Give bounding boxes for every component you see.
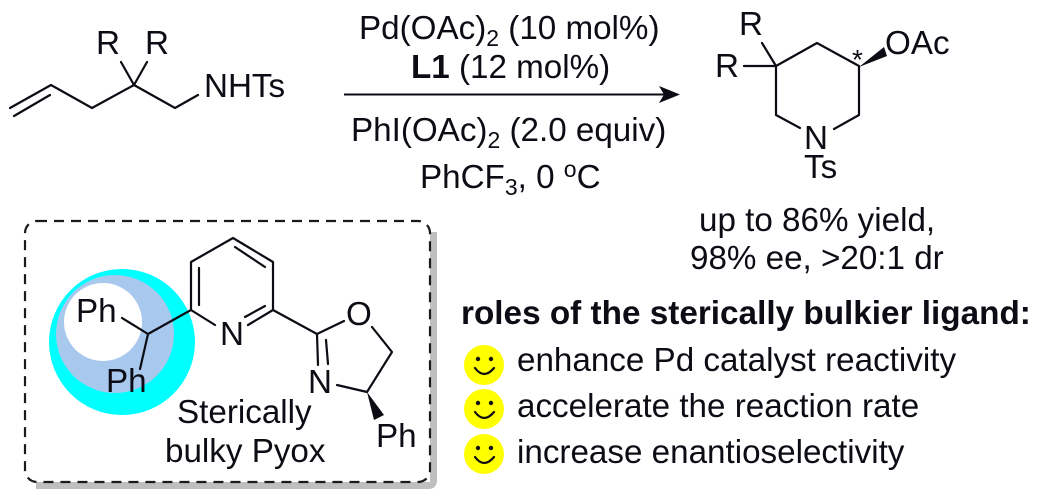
role 3 text: increase enantioselectivity xyxy=(517,434,905,471)
conditions below arrow xyxy=(351,112,666,200)
box shadow xyxy=(36,232,437,489)
reagents above arrow xyxy=(359,10,660,86)
dashed box xyxy=(25,221,430,482)
product: piperidine: R xyxy=(739,6,763,43)
conditions below arrow: 2 xyxy=(487,127,500,153)
icon: smiley 2 xyxy=(464,389,504,429)
product: piperidine: * xyxy=(852,44,863,75)
ligand caption: Sterically xyxy=(177,394,312,431)
reaction arrow xyxy=(344,86,680,103)
ligand structure: Ph xyxy=(376,418,417,455)
product: piperidine: OAc xyxy=(885,25,950,62)
substrate: alkenyl sulfonamide: R xyxy=(145,25,169,62)
role 1 text: enhance Pd catalyst reactivity xyxy=(517,342,956,379)
substrate: alkenyl sulfonamide: R xyxy=(96,25,120,62)
icon: smiley 3 xyxy=(464,434,504,474)
yield and selectivity: 98% ee, >20:1 dr xyxy=(690,240,944,277)
ligand structure: Ph xyxy=(106,363,147,400)
substrate: alkenyl sulfonamide xyxy=(10,25,285,116)
panel: ligand box xyxy=(25,221,437,489)
reagents above arrow: Pd(OAc) xyxy=(359,10,486,47)
conditions below arrow: C xyxy=(577,159,601,196)
ligand caption xyxy=(165,394,326,470)
product: piperidine xyxy=(715,6,950,186)
substrate: alkenyl sulfonamide: NHTs xyxy=(204,68,285,105)
ligand structure: N xyxy=(220,316,244,353)
ligand structure: O xyxy=(346,296,372,333)
yield and selectivity xyxy=(690,202,944,277)
ligand structure: N xyxy=(308,364,332,401)
conditions below arrow: PhI(OAc) xyxy=(351,112,487,149)
conditions below arrow: (2.0 equiv) xyxy=(500,112,666,149)
product: piperidine: N xyxy=(804,120,828,157)
ligand structure xyxy=(76,238,417,455)
conditions below arrow: o xyxy=(564,156,577,182)
icon: smiley 1 xyxy=(464,345,504,385)
reagents above arrow: (10 mol%) xyxy=(499,10,660,47)
product: piperidine: Ts xyxy=(804,149,837,186)
yield and selectivity: up to 86% yield, xyxy=(699,202,935,239)
reagents above arrow: L1 (12 mol%) xyxy=(411,49,610,86)
conditions below arrow: 3 xyxy=(505,174,518,200)
product: piperidine: R xyxy=(715,48,739,85)
steric bulk circles xyxy=(49,269,195,415)
conditions below arrow: PhCF xyxy=(420,159,505,196)
reagents above arrow: 2 xyxy=(486,25,499,51)
roles list xyxy=(464,342,956,474)
role 2 text: accelerate the reaction rate xyxy=(517,388,919,425)
ligand structure: Ph xyxy=(76,293,117,330)
roles heading: roles of the sterically bulkier ligand: xyxy=(461,295,1031,332)
conditions below arrow: , 0 xyxy=(518,159,564,196)
ligand caption: bulky Pyox xyxy=(165,433,326,470)
